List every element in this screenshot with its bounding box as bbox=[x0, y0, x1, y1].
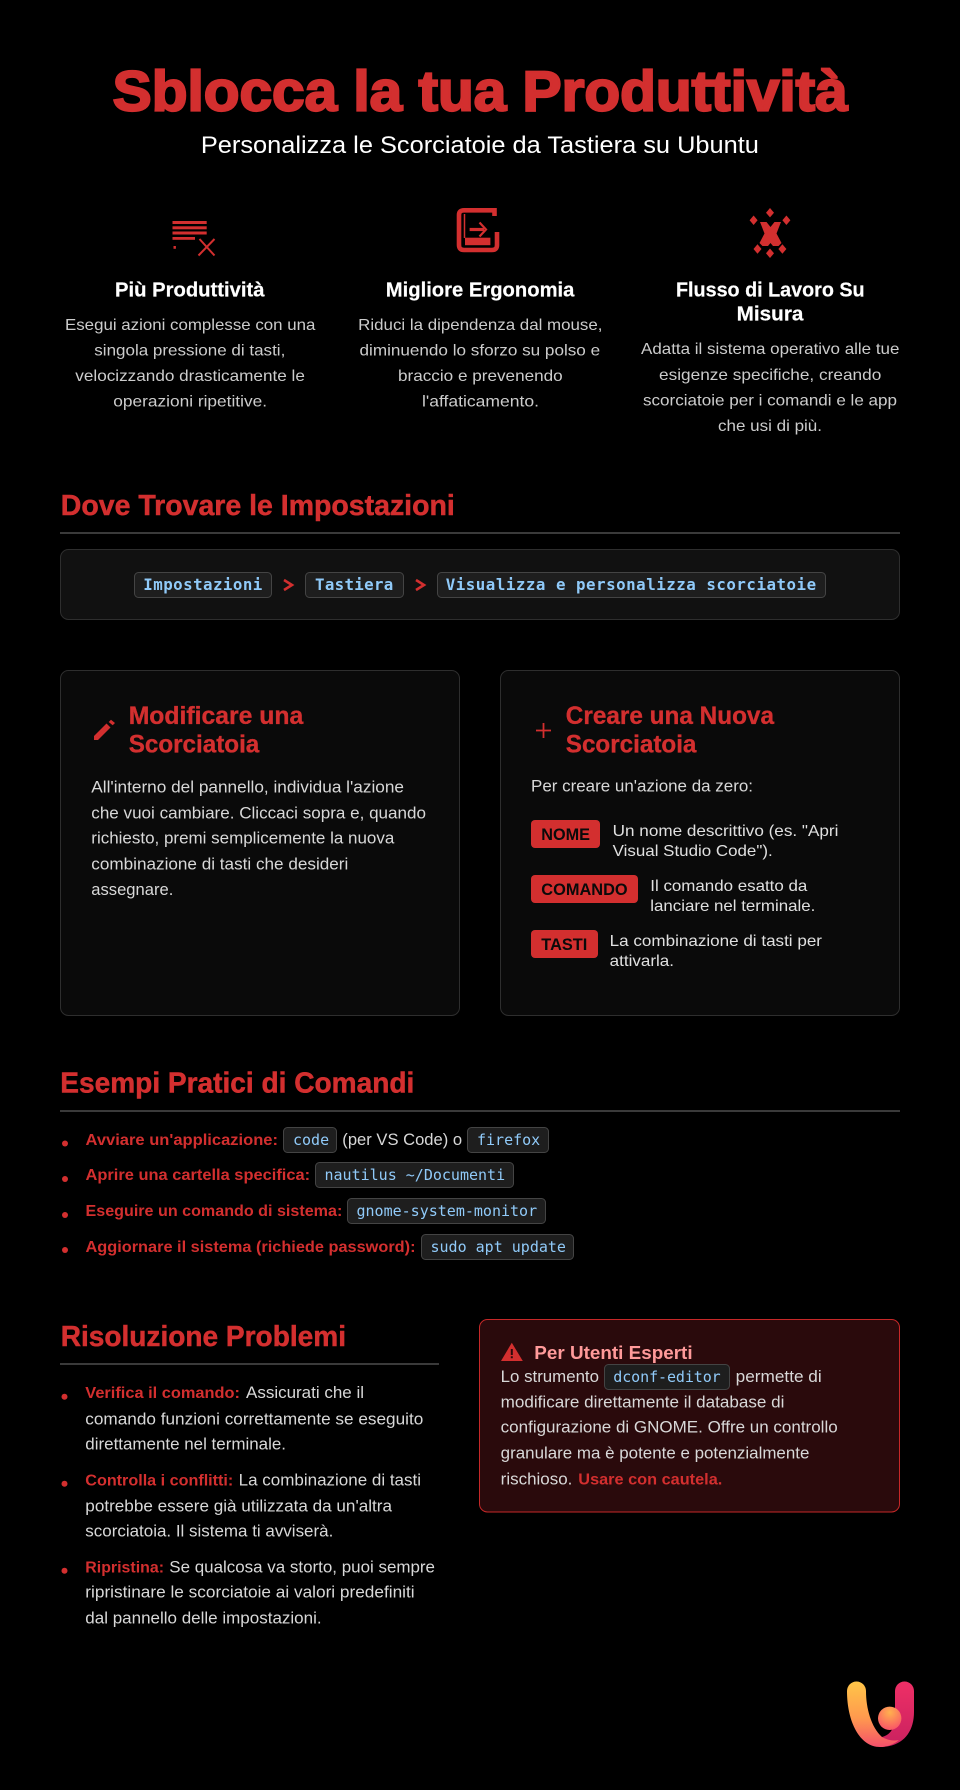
text block: workflow description: esigenze specifiche, creando bbox=[659, 367, 881, 384]
text block: permette di bbox=[736, 1367, 822, 1386]
row: comando di sistema bbox=[62, 1198, 546, 1224]
heading: migliore ergonomia: Migliore Ergonomia bbox=[386, 278, 575, 302]
text block: Lo strumento bbox=[501, 1367, 599, 1386]
row: avviare applicazione: firefox bbox=[477, 1131, 540, 1149]
text block bbox=[501, 1364, 838, 1488]
path step: visualizza e personalizza scorciatoie: Visualizza e personalizza scorciatoie bbox=[446, 575, 816, 594]
list: troubleshooting bbox=[62, 1383, 435, 1627]
text block: productivity description bbox=[65, 317, 315, 411]
text block: richiesto, premi semplicemente la nuova bbox=[91, 828, 395, 847]
icon: pencil bbox=[94, 720, 115, 740]
row: aprire cartella: nautilus ~/Documenti bbox=[324, 1166, 505, 1184]
heading: Modificare una bbox=[129, 702, 304, 730]
item: verifica il comando: Verifica il comando: bbox=[85, 1385, 240, 1402]
item: nome: Visual Studio Code"). bbox=[613, 843, 773, 860]
text block: rischioso. bbox=[501, 1469, 572, 1488]
panel: benefit workflow bbox=[641, 208, 900, 435]
heading: Scorciatoia bbox=[129, 731, 260, 759]
text block: workflow description: che usi di più. bbox=[718, 418, 822, 435]
icon: text lines with x bbox=[172, 221, 214, 256]
item: verifica il comando: comando funzioni correttamente se eseguito bbox=[85, 1409, 423, 1428]
text block: combinazione di tasti che desideri bbox=[91, 854, 348, 873]
row: aggiornare sistema: sudo apt update bbox=[430, 1238, 566, 1256]
list: command examples bbox=[62, 1128, 574, 1260]
row: aprire cartella: Aprire una cartella specifica: bbox=[86, 1167, 310, 1184]
icon: plus bbox=[536, 723, 551, 738]
text block: assegnare. bbox=[91, 880, 173, 899]
item: tasti: TASTI bbox=[541, 936, 587, 954]
row: avviare applicazione: code bbox=[293, 1131, 329, 1149]
heading bbox=[566, 702, 775, 759]
text block: che vuoi cambiare. Cliccaci sopra e, quando bbox=[91, 803, 426, 822]
heading: dove trovare le impostazioni: Dove Trovare le Impostazioni bbox=[61, 490, 455, 522]
path step: tastiera: Tastiera bbox=[315, 575, 393, 594]
icon: sparkle x bbox=[750, 208, 790, 258]
icon: logo bbox=[847, 1682, 914, 1747]
row: avviare applicazione: (per VS Code) o bbox=[342, 1130, 462, 1149]
item: nome: NOME bbox=[541, 826, 590, 844]
text block: granulare ma è potente e potenzialmente bbox=[501, 1443, 809, 1462]
text block: Usare con cautela. bbox=[578, 1471, 722, 1488]
text block: ergonomics description bbox=[358, 317, 602, 411]
icon: exit box bbox=[459, 210, 497, 250]
text block: ergonomics description: l'affaticamento. bbox=[422, 394, 539, 411]
subtitle: Personalizza le Scorciatoie da Tastiera su Ubuntu bbox=[201, 132, 759, 159]
text block: ergonomics description: Riduci la dipendenza dal mouse, bbox=[358, 317, 602, 334]
item: verifica il comando bbox=[62, 1383, 423, 1453]
heading: flusso di lavoro su misura: Flusso di Lavoro Su bbox=[676, 278, 865, 302]
panel: creare una nuova scorciatoia bbox=[500, 670, 900, 1016]
heading bbox=[129, 702, 304, 759]
item: comando bbox=[531, 875, 815, 915]
row: aggiornare sistema: Aggiornare il sistema (richiede password): bbox=[86, 1239, 416, 1256]
heading: Scorciatoia bbox=[566, 731, 697, 759]
item: controlla i conflitti: potrebbe essere già utilizzata da un'altra bbox=[85, 1497, 393, 1516]
panel: modificare una scorciatoia bbox=[60, 670, 460, 1016]
row: comando di sistema: gnome-system-monitor bbox=[356, 1202, 537, 1220]
text block: intro: Per creare un'azione da zero: bbox=[531, 777, 753, 796]
text block: dconf-editor bbox=[613, 1368, 721, 1386]
item: nome bbox=[531, 820, 838, 860]
arrow bbox=[416, 580, 424, 590]
arrow bbox=[284, 580, 292, 590]
item: ripristina bbox=[62, 1557, 435, 1627]
item: comando: lanciare nel terminale. bbox=[650, 898, 815, 915]
heading: più produttività: Più Produttività bbox=[115, 278, 265, 302]
panel: benefit productivity bbox=[65, 221, 315, 411]
icon: warning triangle bbox=[501, 1343, 523, 1361]
text block: workflow description: scorciatoie per i comandi e le app bbox=[643, 393, 897, 410]
path step: impostazioni bbox=[134, 572, 272, 598]
row: avviare applicazione bbox=[62, 1128, 548, 1152]
text block: workflow description: Adatta il sistema operativo alle tue bbox=[641, 341, 900, 358]
text block bbox=[91, 777, 426, 899]
item: verifica il comando: Assicurati che il bbox=[246, 1383, 364, 1402]
item: controlla i conflitti bbox=[62, 1471, 421, 1541]
panel: per utenti esperti callout bbox=[480, 1320, 900, 1512]
item: tasti bbox=[531, 930, 823, 970]
text block: configurazione di GNOME. Offre un controllo bbox=[501, 1418, 838, 1437]
text block: productivity description: singola pressione di tasti, bbox=[94, 343, 285, 360]
text block: All'interno del pannello, individua l'azione bbox=[91, 777, 404, 796]
heading: risoluzione problemi: Risoluzione Problemi bbox=[61, 1321, 346, 1353]
panel: settings path bbox=[60, 550, 900, 620]
path step: impostazioni: Impostazioni bbox=[143, 575, 262, 594]
text block: productivity description: operazioni ripetitive. bbox=[113, 394, 267, 411]
panel: benefit ergonomics bbox=[358, 210, 602, 411]
item: tasti: La combinazione di tasti per bbox=[610, 933, 823, 950]
title: Sblocca la tua Produttività bbox=[113, 59, 848, 123]
item: ripristina: dal pannello delle impostazioni. bbox=[85, 1608, 322, 1627]
item: nome: Un nome descrittivo (es. "Apri bbox=[613, 823, 838, 840]
row: comando di sistema: Eseguire un comando di sistema: bbox=[86, 1203, 342, 1220]
text block: ergonomics description: diminuendo lo sforzo su polso e bbox=[360, 343, 600, 360]
text block: ergonomics description: braccio e prevenendo bbox=[398, 368, 563, 385]
item: ripristina: Ripristina: bbox=[85, 1559, 164, 1576]
item: verifica il comando: direttamente nel terminale. bbox=[85, 1434, 286, 1453]
path step: tastiera bbox=[306, 572, 404, 598]
row: avviare applicazione: Avviare un'applicazione: bbox=[86, 1132, 278, 1149]
item: comando: COMANDO bbox=[541, 881, 628, 899]
item: tasti: attivarla. bbox=[610, 953, 674, 970]
item: comando: Il comando esatto da bbox=[650, 878, 807, 895]
heading: Creare una Nuova bbox=[566, 702, 775, 730]
item: ripristina: ripristinare le scorciatoie ai valori predefiniti bbox=[85, 1583, 415, 1602]
row: aggiornare sistema bbox=[62, 1234, 574, 1260]
text block: productivity description: velocizzando drasticamente le bbox=[75, 368, 305, 385]
item: controlla i conflitti: La combinazione di tasti bbox=[239, 1471, 421, 1490]
text block: modificare direttamente il database di bbox=[501, 1393, 784, 1412]
text block: productivity description: Esegui azioni complesse con una bbox=[65, 317, 315, 334]
heading: esempi pratici di comandi: Esempi Pratici di Comandi bbox=[60, 1068, 414, 1100]
item: ripristina: Se qualcosa va storto, puoi sempre bbox=[169, 1557, 435, 1576]
heading: flusso di lavoro su misura: Misura bbox=[737, 303, 804, 326]
item: controlla i conflitti: Controlla i conflitti: bbox=[85, 1473, 233, 1490]
heading: Per Utenti Esperti bbox=[534, 1342, 693, 1363]
text block: workflow description bbox=[641, 341, 900, 435]
item: controlla i conflitti: scorciatoia. Il sistema ti avviserà. bbox=[85, 1522, 333, 1541]
heading: flusso di lavoro su misura bbox=[676, 278, 865, 326]
row: aprire cartella bbox=[62, 1162, 514, 1188]
